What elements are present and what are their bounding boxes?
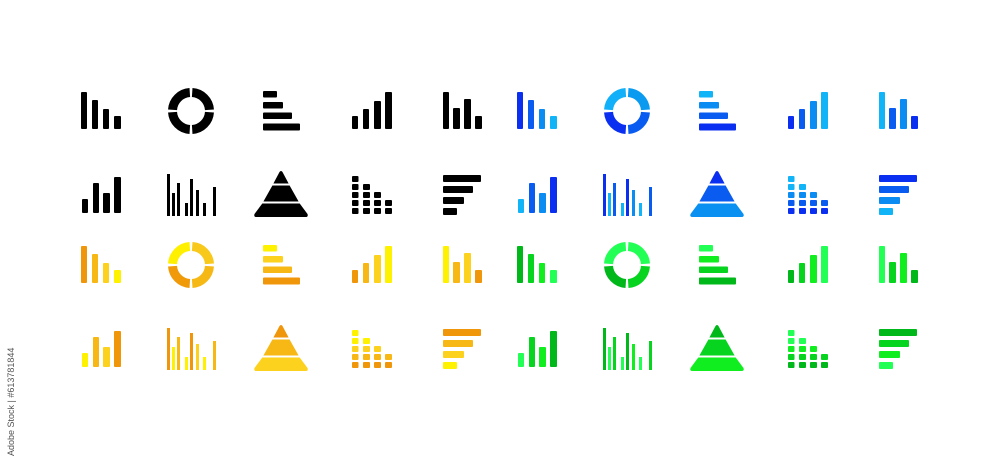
- set: blue icons: [517, 91, 918, 217]
- set: black icons: [81, 91, 482, 217]
- set: green icons: [517, 245, 918, 371]
- set: yellow icons: [81, 245, 482, 371]
- stock id text: Adobe Stock | #613781844: [6, 348, 16, 456]
